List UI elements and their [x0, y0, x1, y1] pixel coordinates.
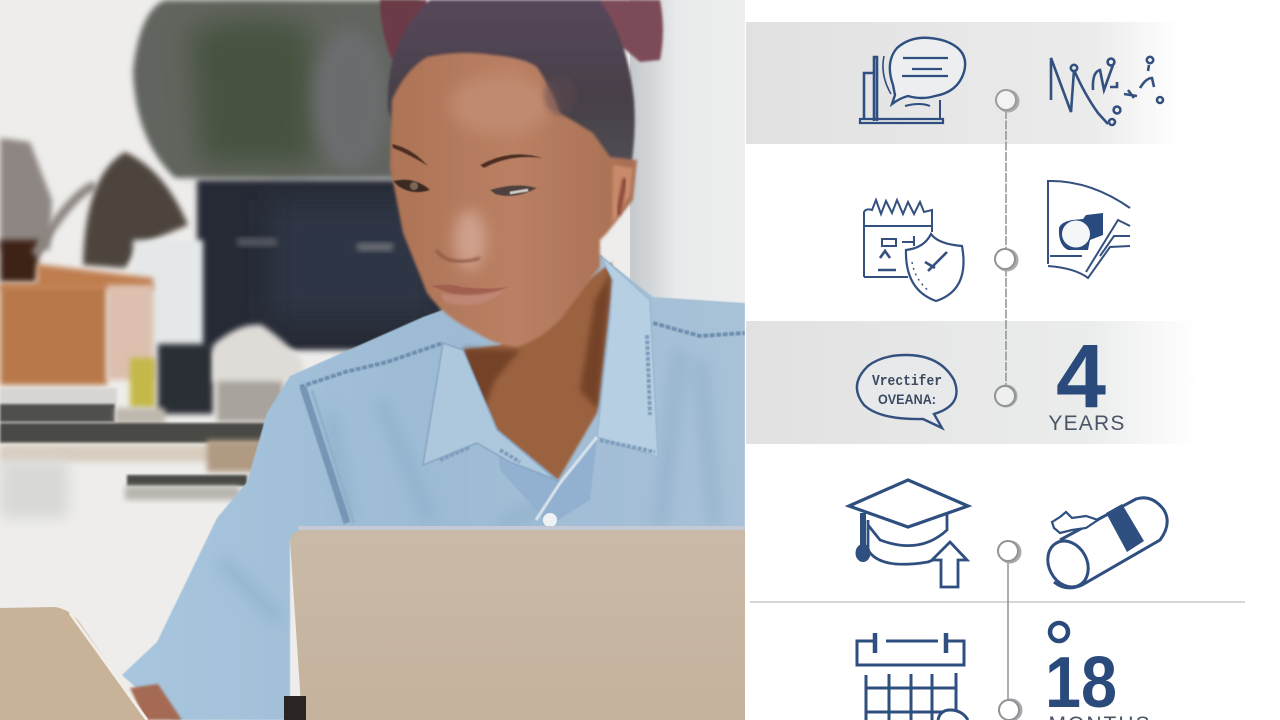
icon: laptop with speech bubble	[860, 38, 965, 123]
eyes	[393, 180, 430, 192]
stat: 18 months	[1045, 623, 1152, 720]
denim shirt	[122, 255, 745, 720]
icon: scribbled line chart	[1051, 57, 1163, 125]
shirt collar	[423, 255, 658, 520]
large laptop	[290, 526, 745, 720]
blurred room background	[0, 0, 745, 720]
face	[390, 53, 637, 347]
stat: 4 years: YEARS	[1048, 412, 1126, 435]
band: row one	[746, 22, 1180, 144]
timeline	[995, 90, 1021, 720]
facial shading	[454, 210, 486, 270]
photo: woman working at a laptop	[0, 0, 745, 720]
hair	[378, 0, 665, 162]
icon: speech bubble with lettering	[857, 355, 956, 428]
icon: folded document with dark blob	[1048, 181, 1130, 278]
eyebrows	[392, 144, 428, 166]
panel: timeline column	[745, 0, 1280, 720]
small laptop in foreground	[0, 607, 147, 720]
shirt button	[543, 513, 557, 527]
stat: 4 years	[1048, 327, 1126, 435]
divider	[750, 601, 1245, 603]
icon: graduation cap with arrow	[849, 480, 968, 587]
icon: calendar grid	[857, 633, 968, 720]
band: row three	[746, 321, 1198, 444]
icon: rolled diploma with seal	[1040, 498, 1167, 594]
stat: 4 years: 4	[1056, 327, 1106, 427]
icon: speech bubble with lettering: Vrectifer	[872, 373, 942, 390]
icon: calendar with shield	[864, 200, 964, 301]
hand	[130, 684, 182, 720]
neck and chest	[463, 262, 612, 480]
nose shadow and mouth	[436, 250, 480, 262]
icon: speech bubble with lettering: OVEANA:	[878, 391, 936, 407]
